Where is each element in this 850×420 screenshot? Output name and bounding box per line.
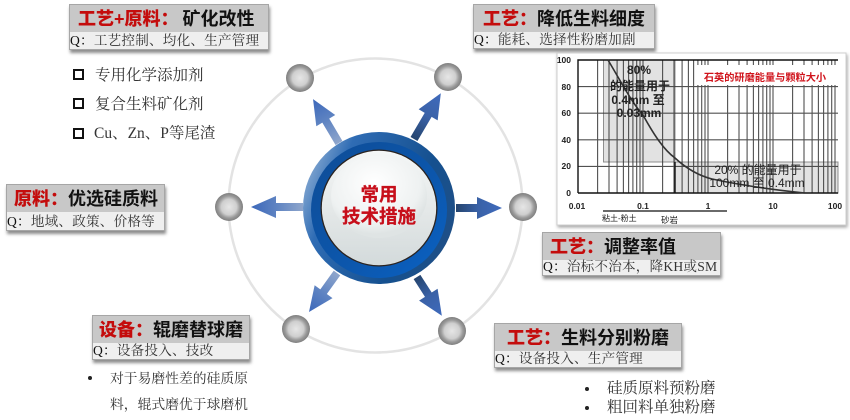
heading	[495, 324, 681, 351]
arrow: left	[251, 196, 303, 218]
subtext: Q：能耗、选择性粉磨加剧	[474, 32, 636, 47]
subtext: Q：地域、政策、价格等	[7, 214, 155, 229]
annotation: 80%: 80%	[627, 63, 651, 77]
bullet text: roller mill	[88, 371, 248, 412]
x axis labels: 100	[828, 201, 842, 211]
item 2: 粗回料单独粉磨	[607, 399, 716, 416]
y axis labels: 100	[557, 55, 571, 65]
log grid	[578, 60, 838, 193]
y axis labels: 80	[562, 82, 571, 92]
item 3: Cu、Zn、P等尾渣	[94, 125, 215, 142]
bullet	[88, 376, 92, 380]
outer ring	[228, 58, 522, 352]
plot frame	[578, 60, 838, 193]
line 2: 料，辊式磨优于球磨机	[110, 397, 248, 412]
soil scale bar: 砂岩	[661, 215, 679, 225]
annotation: 80%: 的能量用于	[610, 78, 670, 93]
panel: 工艺 调整率值	[542, 232, 721, 276]
chart title	[695, 65, 838, 85]
annotation: 20%: 100mm 至 0.4mm	[709, 176, 805, 190]
chart title: 石英的研磨能量与颗粒大小	[704, 71, 827, 84]
subtext: Q：工艺控制、均化、生产管理	[70, 33, 259, 48]
item 2: 复合生料矿化剂	[95, 96, 204, 113]
item 1: 硅质原料预粉磨	[607, 380, 716, 397]
y axis labels: 40	[562, 135, 571, 145]
panel: 设备 辊磨替球磨	[92, 315, 250, 360]
heading: 原料：优选硅质料	[14, 189, 158, 209]
heading: 设备：辊磨替球磨	[99, 320, 243, 340]
bullet list: separate grinding	[585, 380, 716, 416]
panel: 工艺 降低生料细度	[473, 4, 655, 49]
heading	[93, 316, 249, 343]
heading	[70, 5, 268, 32]
x axis labels: 0.1	[637, 201, 649, 211]
energy curve	[608, 60, 805, 193]
panel: 原料 优选硅质料	[6, 184, 165, 231]
arrow: right	[456, 197, 502, 219]
arrow: down-right	[408, 271, 451, 322]
x axis labels: 0.01	[569, 201, 586, 211]
hub label: 常用	[360, 184, 398, 205]
heading: 工艺：生料分别粉磨	[507, 328, 669, 348]
subtext: Q：设备投入、生产管理	[495, 351, 643, 366]
y axis labels: 60	[562, 108, 571, 118]
line 1: 对于易磨性差的硅质原	[110, 371, 248, 386]
panel: 工艺+原料 矿化改性	[69, 4, 269, 50]
arrow: up-right	[405, 88, 450, 145]
hub label: 技术措施	[342, 206, 416, 227]
annotation: 80%: 0.03mm	[617, 106, 661, 120]
x axis labels: 10	[768, 201, 778, 211]
annotation: 80%: 0.4mm 至	[611, 93, 665, 107]
item 1: 专用化学添加剂	[95, 67, 204, 84]
central blue button	[303, 132, 455, 284]
arrow: down-left	[300, 267, 346, 318]
subtext: Q：治标不治本，降KH或SM	[543, 259, 717, 274]
arrows radiating from hub	[251, 88, 502, 322]
grey nodes on ring	[215, 63, 537, 345]
heading	[543, 233, 720, 260]
panel: 工艺 生料分别粉磨	[494, 323, 682, 368]
y axis labels: 20	[562, 161, 571, 171]
annotation: 20%: 20% 的能量用于	[714, 162, 802, 177]
soil scale bar: 粘土-粉土	[602, 213, 637, 223]
heading: 工艺+原料：矿化改性	[78, 9, 255, 29]
card background	[557, 53, 846, 225]
shaded regions	[604, 60, 838, 193]
soil scale bar	[602, 211, 727, 225]
y axis labels: 0	[566, 188, 571, 198]
heading	[474, 5, 654, 32]
heading: 工艺：调整率值	[550, 237, 676, 257]
arrow: up-left	[304, 94, 348, 149]
subtext: Q：设备投入、技改	[93, 343, 213, 358]
heading: 工艺：降低生料细度	[483, 9, 645, 29]
x axis labels: 1	[706, 201, 711, 211]
heading	[7, 185, 164, 212]
list: mineralization measures	[73, 66, 215, 142]
